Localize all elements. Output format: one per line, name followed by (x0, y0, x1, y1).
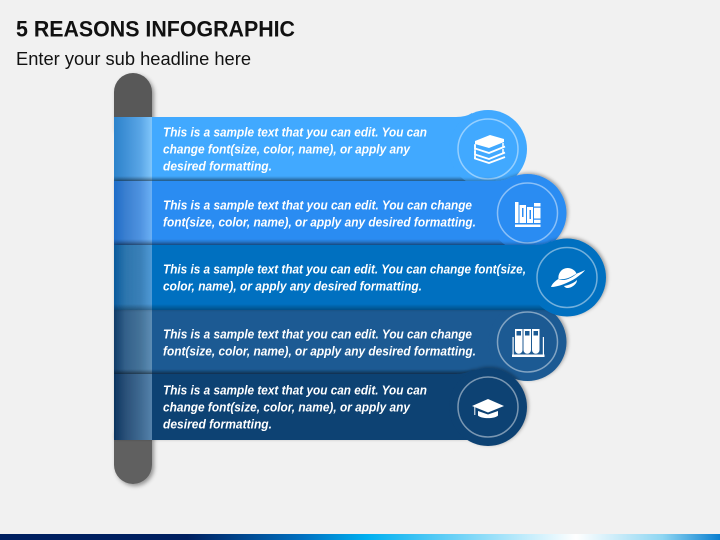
subtitle: Enter your sub headline here (16, 49, 251, 69)
reason 5 band (114, 368, 527, 446)
icon: books stack (458, 119, 518, 179)
reason 4 band (114, 303, 566, 381)
reason 1 text: change font(size, color, name), or apply any (163, 142, 411, 156)
bottom gradient strip (0, 534, 720, 540)
icon: bookshelf (498, 183, 558, 243)
reason 5 text: This is a sample text that you can edit. You can (163, 382, 427, 398)
reason 5 shape (114, 368, 527, 446)
reason 3 text: This is a sample text that you can edit. You can change font(size, (163, 262, 526, 276)
reason 1 shape (114, 110, 527, 188)
reason 1 band (114, 110, 527, 188)
reason 2 shape (114, 174, 566, 252)
reason 3 text: color, name), or apply any desired formatting. (163, 278, 422, 294)
reason 4 text (163, 326, 476, 358)
reason 5 text (163, 382, 427, 432)
reason 1 text (163, 124, 427, 174)
reason 4 shape (114, 303, 566, 381)
icon: graduation cap (458, 377, 518, 437)
reason 5 text: change font(size, color, name), or apply any (163, 400, 411, 414)
reason 1 text: This is a sample text that you can edit. You can (163, 124, 427, 140)
reason 1 text: desired formatting. (163, 158, 272, 174)
icon: ringed planet (537, 248, 597, 308)
reason 4 text: This is a sample text that you can edit. You can change (163, 326, 472, 342)
reason 5 text: desired formatting. (163, 416, 272, 432)
vertical pill spine (114, 73, 152, 484)
reason 2 text: font(size, color, name), or apply any desired formatting. (163, 214, 476, 230)
reason 2 band (114, 174, 566, 252)
reason 2 text: This is a sample text that you can edit. You can change (163, 198, 472, 212)
reason 4 text: font(size, color, name), or apply any desired formatting. (163, 344, 476, 358)
reason 3 shape (114, 238, 606, 316)
reason 3 band (114, 238, 606, 316)
reason 2 text (163, 198, 476, 230)
title: 5 REASONS INFOGRAPHIC (16, 16, 295, 42)
icon: test tubes (498, 312, 558, 372)
reason 3 text (163, 262, 526, 294)
